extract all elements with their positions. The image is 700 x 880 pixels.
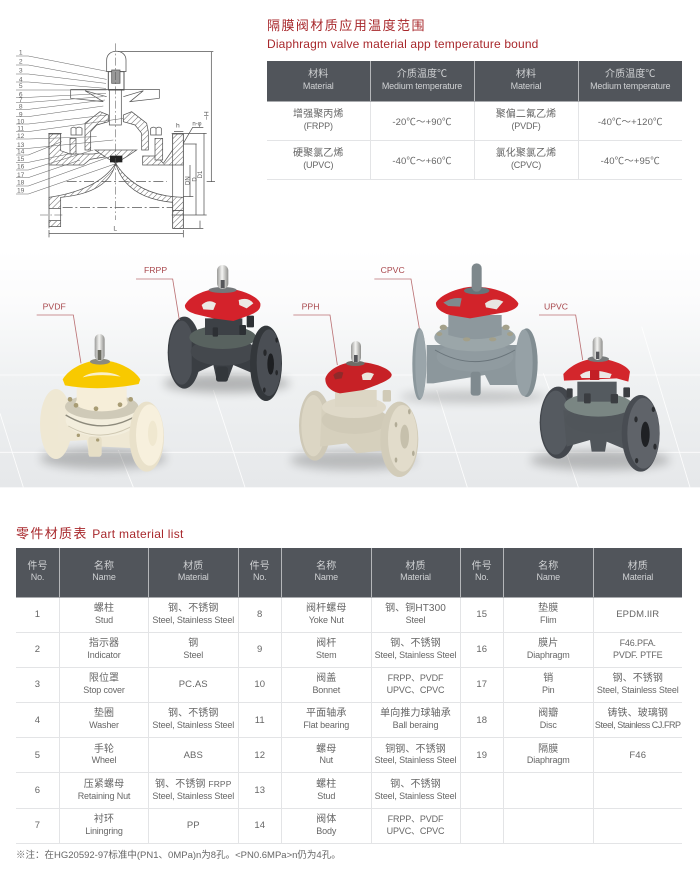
- table header row: 名称: [316, 561, 336, 572]
- table header row: 名称: [538, 561, 558, 572]
- parts row 1: 15: [476, 609, 487, 620]
- parts row 6: 钢、不锈钢: [390, 779, 441, 790]
- parts row 4: 单向推力球轴承: [380, 708, 451, 719]
- parts row 4: 垫圈: [94, 708, 114, 719]
- parts row 2: 9: [257, 644, 262, 655]
- parts row 5: 12: [254, 750, 265, 761]
- parts row 2: 钢: [188, 638, 198, 649]
- row: FRPP and PVDF: [293, 108, 663, 131]
- row: UPVC and CPVC: 硬聚氯乙烯: [293, 148, 344, 159]
- label: CPVC: CPVC: [381, 265, 405, 275]
- dimension labels: D: [193, 177, 199, 182]
- floor background: [0, 250, 700, 487]
- parts row 4: 钢、不锈钢: [168, 708, 218, 719]
- parts row 5: [35, 743, 646, 765]
- dimension labels: [113, 111, 211, 233]
- parts row 2: Indicator: [87, 650, 121, 660]
- parts row 1: 螺柱: [94, 603, 114, 614]
- table header row: 材质: [628, 561, 648, 572]
- parts row 1: EPDM.IIR: [616, 609, 659, 620]
- bolts: [71, 127, 161, 135]
- table header row: 件号: [27, 561, 48, 572]
- table header row: 材料: [308, 69, 328, 80]
- parts row 1: Yoke Nut: [309, 615, 344, 625]
- parts row 2: Steel: [183, 650, 203, 660]
- parts row 3: 17: [476, 679, 487, 690]
- row: FRPP and PVDF: 聚偏二氟乙烯: [496, 109, 556, 120]
- parts row 4: 18: [476, 715, 487, 726]
- parts row 4: Ball beraing: [393, 720, 438, 730]
- row: UPVC and CPVC: [293, 147, 660, 170]
- valve body hatched sections: [49, 112, 183, 228]
- part numbers 1-19: 19: [17, 188, 25, 195]
- parts row 1: 钢、不锈钢: [168, 603, 218, 614]
- parts row 3: FRPP、PVDF: [388, 673, 443, 683]
- dimension labels: DN: [185, 176, 191, 185]
- parts row 2: [35, 637, 662, 660]
- part numbers 1-19: 6: [19, 92, 23, 99]
- parts row 7: UPVC、CPVC: [387, 826, 444, 836]
- product photo band: [0, 263, 700, 488]
- table header row: 介质温度℃: [605, 69, 656, 80]
- valve: FRPP: [163, 265, 290, 401]
- parts row 5: Steel, Stainless Steel: [375, 755, 456, 765]
- parts row 3: 3: [35, 679, 40, 690]
- parts row 7: Liningring: [85, 826, 123, 836]
- parts row 2: 16: [476, 644, 487, 655]
- parts row 7: PP: [187, 820, 200, 831]
- row: FRPP and PVDF: -40℃～+120℃: [598, 116, 663, 128]
- parts row 2: Stem: [316, 650, 336, 660]
- parts row 3: 钢、不锈钢: [612, 673, 663, 684]
- row: FRPP and PVDF: (FRPP): [304, 120, 333, 130]
- parts row 6: 螺柱: [316, 779, 336, 790]
- heading: temperature table title: 隔膜阀材质应用温度范围: [267, 18, 426, 33]
- parts row 4: Steel, Stainless CJ.FRP: [595, 720, 681, 730]
- parts row 6: Stud: [317, 791, 335, 801]
- valve: CPVC: [400, 263, 547, 403]
- parts row 6: Retaining Nut: [78, 791, 130, 801]
- parts row 1: Steel, Stainless Steel: [152, 615, 234, 625]
- parts row 2: PVDF. PTFE: [613, 650, 662, 660]
- dimension labels: D1: [198, 170, 204, 178]
- parts row 6: Steel, Stainless Steel: [375, 791, 456, 801]
- part numbers 1-19: 14: [17, 149, 25, 156]
- parts row 3: Steel, Stainless Steel: [597, 685, 679, 695]
- dimension labels: ~H: [204, 111, 211, 120]
- parts row 5: Diaphragm: [527, 755, 570, 765]
- part numbers 1-19: 5: [19, 83, 23, 90]
- part numbers 1-19: 16: [17, 164, 25, 171]
- diaphragm disc: [110, 156, 122, 162]
- label: UPVC: [539, 302, 583, 360]
- dimension labels: n-φ: [192, 121, 202, 127]
- parts row 4: [34, 707, 681, 730]
- row: UPVC and CPVC: -40℃～+60℃: [392, 156, 452, 166]
- parts row 1: Steel: [406, 615, 425, 625]
- table header row: 材料: [516, 69, 536, 80]
- part numbers 1-19: 2: [19, 59, 23, 66]
- parts row 7: [35, 813, 444, 836]
- parts row 2: 指示器: [89, 638, 119, 649]
- parts row 7: 14: [254, 820, 265, 831]
- label: PVDF: [37, 302, 81, 363]
- table header row: [16, 548, 682, 836]
- parts row 4: Disc: [540, 720, 557, 730]
- part numbers 1-19: 4: [19, 76, 23, 83]
- table header row: Material: [400, 572, 431, 582]
- heading: part material list: 零件材质表 Part material list: [16, 526, 184, 541]
- parts row 4: 11: [255, 715, 265, 726]
- table header row: 材质: [405, 561, 426, 572]
- part numbers 1-19: 13: [17, 142, 25, 149]
- parts row 3: Bonnet: [312, 685, 340, 695]
- row: UPVC and CPVC: 氯化聚氯乙烯: [496, 148, 556, 159]
- dimension labels: L: [113, 226, 117, 233]
- row: UPVC and CPVC: (UPVC): [303, 160, 333, 170]
- parts row 3: UPVC、CPVC: [387, 685, 444, 695]
- parts row 2: Diaphragm: [527, 650, 570, 660]
- parts row 1: 钢、铜HT300: [385, 603, 446, 614]
- part numbers 1-19: 17: [17, 172, 25, 179]
- parts row 4: 平面轴承: [306, 708, 346, 719]
- table header row: Medium temperature: [590, 81, 670, 91]
- parts row 7: Body: [316, 826, 336, 836]
- parts row 5: F46: [629, 750, 646, 761]
- table header row: Material: [303, 81, 334, 91]
- part numbers 1-19: [17, 50, 25, 195]
- row: UPVC and CPVC: -40℃～+95℃: [601, 156, 660, 166]
- parts row 1: [35, 602, 659, 625]
- part numbers 1-19: 10: [17, 119, 25, 126]
- parts row 4: Steel, Stainless Steel: [152, 720, 234, 730]
- parts row 7: 衬环: [94, 814, 114, 825]
- table header row: 件号: [250, 561, 270, 572]
- parts row 2: F46.PFA.: [620, 638, 656, 648]
- parts row 4: 铸铁、玻璃钢: [607, 708, 668, 719]
- parts row 3: PC.AS: [179, 679, 208, 690]
- parts row 3: Pin: [542, 685, 555, 695]
- parts row 4: 4: [35, 715, 40, 726]
- parts row 5: 5: [35, 750, 40, 761]
- label: FRPP: FRPP: [144, 265, 167, 275]
- table header row: No.: [475, 572, 489, 582]
- valve: PPH: [290, 341, 418, 477]
- handwheel: [71, 51, 159, 125]
- table header row: 名称: [94, 561, 114, 572]
- parts row 6: 压紧螺母: [84, 779, 124, 790]
- part numbers 1-19: 1: [19, 50, 23, 57]
- parts row 5: ABS: [184, 750, 203, 761]
- row: FRPP and PVDF: (PVDF): [511, 120, 541, 130]
- part material table: [16, 548, 682, 844]
- parts row 1: Flim: [540, 615, 556, 625]
- label: CPVC: [374, 265, 419, 328]
- parts row 5: Nut: [319, 755, 333, 765]
- part numbers 1-19: 7: [19, 97, 23, 104]
- part numbers 1-19: 12: [17, 133, 25, 140]
- parts row 4: 阀瓣: [538, 708, 558, 719]
- parts row 3: 10: [254, 679, 265, 690]
- parts row 2: 钢、不锈钢: [390, 638, 441, 649]
- label: PVDF: PVDF: [43, 302, 66, 312]
- parts row 5: 19: [476, 750, 487, 761]
- table header row: Material: [178, 572, 209, 582]
- parts row 1: 1: [35, 609, 40, 620]
- label: PPH: PPH: [302, 302, 319, 312]
- heading: temperature table title: [267, 18, 539, 51]
- temperature range table: [267, 61, 682, 180]
- row: UPVC and CPVC: (CPVC): [511, 160, 541, 170]
- label: PPH: [293, 302, 337, 365]
- parts row 4: Washer: [89, 720, 119, 730]
- part numbers 1-19: 3: [19, 68, 23, 75]
- part numbers 1-19: 8: [19, 104, 23, 111]
- engineering drawing: valve cross-section: [16, 43, 215, 238]
- parts row 2: 膜片: [538, 638, 558, 649]
- row: FRPP and PVDF: -20℃～+90℃: [392, 116, 452, 128]
- table header row: [267, 61, 682, 170]
- parts row 7: FRPP、PVDF: [388, 814, 443, 824]
- parts row 5: 隔膜: [538, 744, 558, 755]
- label: UPVC: UPVC: [544, 302, 568, 312]
- parts row 3: [35, 672, 679, 695]
- table header row: Material: [622, 572, 653, 582]
- table header row: 件号: [472, 561, 492, 572]
- table header row: Medium temperature: [382, 81, 462, 91]
- table header row: 介质温度℃: [397, 69, 447, 80]
- parts row 5: Wheel: [92, 755, 116, 765]
- parts row 5: 铜钢、不锈钢: [385, 744, 446, 755]
- parts row 3: 销: [543, 673, 553, 684]
- heading: temperature table title: Diaphragm valve material app temperature bound: [267, 37, 539, 51]
- parts row 6: 13: [254, 785, 265, 796]
- parts row 6: Steel, Stainless Steel: [152, 791, 234, 801]
- table header row: 材质: [183, 561, 203, 572]
- parts row 3: Stop cover: [83, 685, 125, 695]
- parts row 6: 6: [35, 785, 40, 796]
- part numbers 1-19: 9: [19, 111, 23, 118]
- parts row 6: [35, 778, 456, 801]
- part numbers 1-19: 18: [17, 180, 25, 187]
- parts row 2: 2: [35, 644, 40, 655]
- parts row 4: Flat bearing: [303, 720, 349, 730]
- parts row 1: 垫膜: [538, 603, 558, 614]
- table header row: Material: [511, 81, 541, 91]
- parts row 7: 7: [35, 820, 40, 831]
- leader lines: [16, 56, 123, 194]
- parts row 1: Stud: [95, 615, 113, 625]
- dimension labels: h: [176, 122, 180, 129]
- valve: PVDF: [40, 334, 167, 472]
- parts row 1: 阀杆螺母: [306, 603, 346, 614]
- parts row 7: 阀体: [316, 814, 336, 825]
- table header row: No.: [253, 572, 267, 582]
- part numbers 1-19: 15: [17, 156, 25, 163]
- table header row: No.: [31, 572, 44, 582]
- valve: UPVC: [530, 337, 670, 472]
- row: FRPP and PVDF: 增强聚丙烯: [293, 109, 344, 120]
- parts row 3: 阀盖: [316, 673, 336, 684]
- part numbers 1-19: 11: [17, 126, 24, 133]
- footnote: ※注：在HG20592-97标准中(PN1、0MPa)n为8孔。<PN0.6MPa>n仍为4孔。: [16, 850, 341, 861]
- table header row: Name: [537, 572, 560, 582]
- parts row 5: 手轮: [94, 744, 114, 755]
- parts row 5: 螺母: [316, 744, 336, 755]
- parts row 2: Steel, Stainless Steel: [375, 650, 456, 660]
- label: FRPP: [136, 265, 179, 320]
- table header row: Name: [315, 572, 338, 582]
- parts row 3: 限位罩: [89, 673, 119, 684]
- parts row 1: 8: [257, 609, 262, 620]
- parts row 2: 阀杆: [316, 638, 336, 649]
- parts row 6: 钢、不锈钢 FRPP: [155, 779, 231, 790]
- table header row: Name: [92, 572, 116, 582]
